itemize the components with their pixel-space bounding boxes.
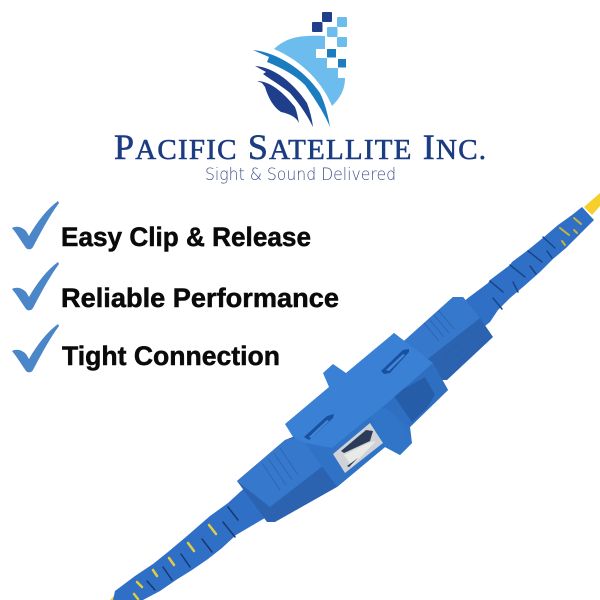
check icon 2 <box>12 262 59 310</box>
adapter flange <box>368 408 412 455</box>
yellow cable bottom left <box>110 595 121 600</box>
metal latch <box>333 423 383 473</box>
tagline: Sight & Sound Delivered <box>205 165 396 184</box>
company name: PACIFIC SATELLITE INC. <box>114 127 486 167</box>
upper slot <box>381 349 409 374</box>
feature text 2: Reliable Performance <box>61 283 339 313</box>
logo icon <box>253 12 347 127</box>
left strain relief boot <box>113 485 270 600</box>
feature text 1: Easy Clip & Release <box>61 222 311 252</box>
right strain relief boot <box>460 207 594 330</box>
yellow cable top right <box>584 193 600 215</box>
right connector housing <box>395 297 493 380</box>
adapter base fill <box>300 333 448 487</box>
check icon 1 <box>12 201 59 249</box>
left connector housing <box>237 430 337 522</box>
adapter end face <box>380 363 448 427</box>
lower slot <box>304 414 334 440</box>
fibre connector assembly <box>110 193 600 600</box>
feature text 3: Tight Connection <box>62 341 280 371</box>
adapter top face <box>285 333 433 448</box>
adapter front face <box>305 417 385 487</box>
check icon 3 <box>12 324 59 372</box>
